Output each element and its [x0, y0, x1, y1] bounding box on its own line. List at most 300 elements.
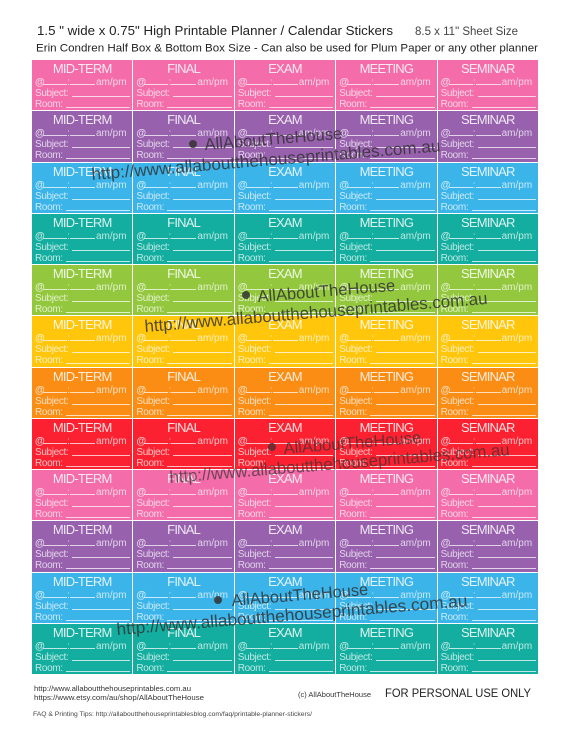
- sheet size note: 8.5 x 11" Sheet Size: [415, 26, 518, 38]
- row 8: red stickers: @: [238, 436, 248, 447]
- row 9: pink stickers: am/pm: [299, 487, 329, 498]
- row 8: red stickers: @: [339, 436, 349, 447]
- row 9: pink stickers: Room:: [136, 509, 164, 520]
- sticker grid: [32, 60, 538, 674]
- row 6: yellow stickers: MEETING: [360, 317, 413, 332]
- row 5: green stickers: Room:: [35, 304, 63, 315]
- row 1: pink stickers: Subject:: [339, 88, 373, 99]
- row 2: purple stickers: Subject:: [441, 139, 474, 150]
- row 7: orange stickers: Subject:: [339, 396, 373, 406]
- row 6: yellow stickers: Subject:: [441, 344, 474, 355]
- row 5: green stickers: Subject:: [35, 293, 68, 304]
- row 10: purple stickers: Subject:: [136, 549, 170, 560]
- row 10: purple stickers: Room:: [35, 560, 63, 571]
- row 8: red stickers: am/pm: [400, 436, 431, 447]
- row 12: teal stickers: SEMINAR: [461, 625, 515, 640]
- row 7: orange stickers: am/pm: [502, 384, 532, 396]
- row 2: purple stickers: Room:: [136, 150, 164, 161]
- row 10: purple stickers: Subject:: [441, 549, 474, 560]
- row 3: blue stickers: [32, 163, 538, 213]
- row 2: purple stickers: Room:: [35, 150, 63, 161]
- row 4: teal stickers: :: [168, 231, 171, 242]
- row 8: red stickers: Room:: [339, 458, 367, 469]
- row 5: green stickers: Subject:: [238, 293, 271, 304]
- row 10: purple stickers: Room:: [441, 560, 468, 571]
- row 3: blue stickers: am/pm: [502, 180, 532, 190]
- row 5: green stickers: Room:: [441, 304, 468, 315]
- row 6: yellow stickers: SEMINAR: [461, 317, 515, 332]
- row 9: pink stickers: :: [67, 487, 70, 498]
- row 9: pink stickers: MEETING: [360, 471, 413, 486]
- header text: [36, 23, 538, 54]
- row 6: yellow stickers: @: [35, 333, 45, 344]
- row 3: blue stickers: :: [270, 180, 273, 190]
- row 11: blue stickers: Subject:: [136, 600, 170, 612]
- row 8: red stickers: Subject:: [339, 447, 373, 458]
- row 6: yellow stickers: @: [339, 333, 349, 344]
- row 9: pink stickers: @: [339, 487, 349, 498]
- row 4: teal stickers: :: [67, 231, 70, 242]
- row 8: red stickers: Subject:: [35, 447, 68, 458]
- row 8: red stickers: Room:: [35, 458, 63, 469]
- row 6: yellow stickers: @: [238, 333, 248, 344]
- FAQ link: FAQ & Printing Tips: http://allaboutthehouseprintablesblog.com/faq/printable-planner-stickers/: [33, 712, 312, 718]
- row 5: green stickers: MEETING: [360, 266, 413, 281]
- row 2: purple stickers: Room:: [441, 150, 468, 161]
- row 8: red stickers: :: [67, 436, 70, 447]
- row 5: green stickers: :: [270, 282, 273, 293]
- row 7: orange stickers: Room:: [136, 406, 164, 418]
- row 9: pink stickers: MID-TERM: [53, 471, 111, 486]
- row 1: pink stickers: am/pm: [299, 77, 329, 88]
- row 8: red stickers: Subject:: [238, 447, 271, 458]
- row 7: orange stickers: :: [168, 384, 171, 396]
- row 4: teal stickers: Subject:: [35, 242, 68, 253]
- row 1: pink stickers: @: [136, 77, 146, 88]
- row 12: teal stickers: Room:: [441, 663, 468, 674]
- row 11: blue stickers: Subject:: [441, 600, 474, 612]
- row 12: teal stickers: FINAL: [167, 625, 200, 640]
- row 6: yellow stickers: am/pm: [96, 333, 127, 344]
- row 5: green stickers: :: [67, 282, 70, 293]
- row 10: purple stickers: @: [339, 538, 349, 549]
- row 11: blue stickers: EXAM: [268, 574, 302, 588]
- row 11: blue stickers: MID-TERM: [53, 574, 111, 588]
- row 6: yellow stickers: FINAL: [167, 317, 200, 332]
- row 9: pink stickers: @: [238, 487, 248, 498]
- row 6: yellow stickers: @: [136, 333, 146, 344]
- row 2: purple stickers: MEETING: [360, 112, 413, 127]
- row 3: blue stickers: :: [473, 180, 475, 190]
- row 2: purple stickers: Subject:: [136, 139, 170, 150]
- row 3: blue stickers: @: [441, 180, 450, 190]
- row 9: pink stickers: Subject:: [339, 498, 373, 509]
- row 1: pink stickers: MEETING: [360, 61, 413, 76]
- personal use notice: FOR PERSONAL USE ONLY: [385, 688, 531, 700]
- row 5: green stickers: am/pm: [400, 282, 431, 293]
- row 12: teal stickers: @: [441, 641, 450, 652]
- row 9: pink stickers: Room:: [238, 509, 266, 520]
- row 9: pink stickers: @: [35, 487, 45, 498]
- row 5: green stickers: EXAM: [268, 266, 302, 281]
- row 1: pink stickers: :: [168, 77, 171, 88]
- row 3: blue stickers: :: [67, 180, 70, 190]
- footer links: https://www.etsy.com/au/shop/AllAboutTheHouse: [34, 693, 204, 702]
- row 9: pink stickers: :: [371, 487, 374, 498]
- row 12: teal stickers: [32, 624, 538, 674]
- footer links: [34, 684, 204, 702]
- row 1: pink stickers: am/pm: [197, 77, 228, 88]
- row 8: red stickers: [32, 419, 538, 469]
- row 3: blue stickers: EXAM: [268, 164, 302, 178]
- row 3: blue stickers: Room:: [238, 202, 266, 212]
- row 4: teal stickers: :: [371, 231, 374, 242]
- row 10: purple stickers: am/pm: [502, 538, 532, 549]
- row 7: orange stickers: [32, 368, 538, 418]
- row 1: pink stickers: Room:: [441, 99, 468, 110]
- row 6: yellow stickers: MID-TERM: [53, 317, 111, 332]
- row 9: pink stickers: FINAL: [167, 471, 200, 486]
- row 8: red stickers: MEETING: [360, 420, 413, 435]
- row 8: red stickers: :: [371, 436, 374, 447]
- row 5: green stickers: Subject:: [339, 293, 373, 304]
- row 4: teal stickers: @: [35, 231, 45, 242]
- row 4: teal stickers: FINAL: [167, 215, 200, 230]
- row 7: orange stickers: :: [371, 384, 374, 396]
- row 3: blue stickers: @: [238, 180, 248, 190]
- row 11: blue stickers: FINAL: [167, 574, 200, 588]
- row 7: orange stickers: Room:: [35, 406, 63, 418]
- row 12: teal stickers: :: [168, 641, 171, 652]
- row 12: teal stickers: Subject:: [35, 652, 68, 663]
- row 4: teal stickers: MEETING: [360, 215, 413, 230]
- row 11: blue stickers: Room:: [238, 612, 266, 622]
- row 1: pink stickers: Room:: [35, 99, 63, 110]
- row 5: green stickers: Room:: [238, 304, 266, 315]
- row 4: teal stickers: @: [136, 231, 146, 242]
- row 4: teal stickers: Subject:: [441, 242, 474, 253]
- row 12: teal stickers: Room:: [339, 663, 367, 674]
- row 2: purple stickers: EXAM: [268, 112, 302, 127]
- row 12: teal stickers: MID-TERM: [53, 625, 111, 640]
- row 2: purple stickers: @: [339, 128, 349, 139]
- row 11: blue stickers: am/pm: [96, 590, 127, 600]
- row 8: red stickers: Room:: [441, 458, 468, 469]
- row 3: blue stickers: am/pm: [400, 180, 431, 190]
- row 12: teal stickers: Subject:: [136, 652, 170, 663]
- row 2: purple stickers: :: [67, 128, 70, 139]
- row 5: green stickers: @: [339, 282, 349, 293]
- row 3: blue stickers: MID-TERM: [53, 164, 111, 178]
- row 11: blue stickers: Subject:: [35, 600, 68, 612]
- row 10: purple stickers: am/pm: [96, 538, 127, 549]
- row 3: blue stickers: :: [168, 180, 171, 190]
- row 12: teal stickers: :: [371, 641, 374, 652]
- row 4: teal stickers: Room:: [339, 253, 367, 264]
- row 1: pink stickers: FINAL: [167, 61, 200, 76]
- row 10: purple stickers: am/pm: [400, 538, 431, 549]
- row 7: orange stickers: EXAM: [268, 368, 302, 384]
- row 9: pink stickers: am/pm: [96, 487, 127, 498]
- row 10: purple stickers: am/pm: [197, 538, 228, 549]
- row 2: purple stickers: Room:: [238, 150, 266, 161]
- row 7: orange stickers: am/pm: [197, 384, 228, 396]
- row 6: yellow stickers: :: [270, 333, 273, 344]
- row 11: blue stickers: am/pm: [299, 590, 329, 600]
- row 11: blue stickers: :: [67, 590, 70, 600]
- row 5: green stickers: @: [238, 282, 248, 293]
- row 2: purple stickers: Subject:: [339, 139, 373, 150]
- row 8: red stickers: Subject:: [136, 447, 170, 458]
- row 7: orange stickers: :: [473, 384, 475, 396]
- row 2: purple stickers: am/pm: [299, 128, 329, 139]
- row 10: purple stickers: [32, 521, 538, 572]
- row 7: orange stickers: @: [441, 384, 450, 396]
- row 10: purple stickers: :: [67, 538, 70, 549]
- row 4: teal stickers: MID-TERM: [53, 215, 111, 230]
- row 10: purple stickers: @: [238, 538, 248, 549]
- row 11: blue stickers: @: [136, 590, 146, 600]
- row 7: orange stickers: Subject:: [441, 396, 474, 406]
- row 8: red stickers: Room:: [238, 458, 266, 469]
- row 11: blue stickers: Subject:: [339, 600, 373, 612]
- row 10: purple stickers: Room:: [339, 560, 367, 571]
- row 11: blue stickers: am/pm: [197, 590, 228, 600]
- row 9: pink stickers: am/pm: [502, 487, 532, 498]
- row 8: red stickers: Subject:: [441, 447, 474, 458]
- row 3: blue stickers: @: [35, 180, 45, 190]
- row 7: orange stickers: am/pm: [96, 384, 127, 396]
- row 10: purple stickers: @: [441, 538, 450, 549]
- row 7: orange stickers: :: [67, 384, 70, 396]
- watermark 3: AllAboutTheHouse: [283, 429, 422, 458]
- row 12: teal stickers: EXAM: [268, 625, 302, 640]
- watermark 1: http://www.allaboutthehouseprintables.com.au: [91, 136, 441, 184]
- row 12: teal stickers: Room:: [136, 663, 164, 674]
- row 4: teal stickers: am/pm: [197, 231, 228, 242]
- row 1: pink stickers: MID-TERM: [53, 61, 111, 76]
- row 12: teal stickers: :: [67, 641, 70, 652]
- row 2: purple stickers: Subject:: [238, 139, 271, 150]
- row 7: orange stickers: Room:: [238, 406, 266, 418]
- row 3: blue stickers: am/pm: [197, 180, 228, 190]
- row 1: pink stickers: @: [339, 77, 349, 88]
- row 2: purple stickers: SEMINAR: [461, 112, 515, 127]
- row 7: orange stickers: @: [238, 384, 248, 396]
- row 8: red stickers: @: [441, 436, 450, 447]
- row 7: orange stickers: am/pm: [299, 384, 329, 396]
- row 11: blue stickers: am/pm: [400, 590, 431, 600]
- row 2: purple stickers: am/pm: [502, 128, 532, 139]
- row 3: blue stickers: FINAL: [167, 164, 200, 178]
- row 10: purple stickers: Room:: [238, 560, 266, 571]
- row 9: pink stickers: am/pm: [400, 487, 431, 498]
- row 6: yellow stickers: :: [473, 333, 475, 344]
- row 7: orange stickers: am/pm: [400, 384, 431, 396]
- row 5: green stickers: Room:: [136, 304, 164, 315]
- row 10: purple stickers: MID-TERM: [53, 522, 111, 537]
- row 4: teal stickers: @: [339, 231, 349, 242]
- row 8: red stickers: @: [35, 436, 45, 447]
- row 2: purple stickers: FINAL: [167, 112, 200, 127]
- row 12: teal stickers: @: [136, 641, 146, 652]
- row 3: blue stickers: Room:: [339, 202, 367, 212]
- row 1: pink stickers: :: [67, 77, 70, 88]
- row 4: teal stickers: Subject:: [339, 242, 373, 253]
- row 12: teal stickers: Subject:: [339, 652, 373, 663]
- row 11: blue stickers: Room:: [441, 612, 468, 622]
- row 4: teal stickers: @: [441, 231, 450, 242]
- row 7: orange stickers: Subject:: [136, 396, 170, 406]
- row 11: blue stickers: Room:: [339, 612, 367, 622]
- row 11: blue stickers: am/pm: [502, 590, 532, 600]
- row 1: pink stickers: EXAM: [268, 61, 302, 76]
- row 9: pink stickers: Room:: [35, 509, 63, 520]
- row 3: blue stickers: Subject:: [35, 190, 68, 202]
- row 7: orange stickers: MEETING: [360, 368, 413, 384]
- row 8: red stickers: am/pm: [197, 436, 228, 447]
- row 12: teal stickers: am/pm: [299, 641, 329, 652]
- row 11: blue stickers: Room:: [136, 612, 164, 622]
- row 10: purple stickers: SEMINAR: [461, 522, 515, 537]
- row 12: teal stickers: @: [339, 641, 349, 652]
- row 1: pink stickers: Subject:: [441, 88, 474, 99]
- row 11: blue stickers: :: [473, 590, 475, 600]
- row 4: teal stickers: Room:: [238, 253, 266, 264]
- row 12: teal stickers: MEETING: [360, 625, 413, 640]
- row 3: blue stickers: Room:: [35, 202, 63, 212]
- row 10: purple stickers: MEETING: [360, 522, 413, 537]
- row 8: red stickers: am/pm: [96, 436, 127, 447]
- row 2: purple stickers: [32, 111, 538, 162]
- row 11: blue stickers: :: [371, 590, 374, 600]
- row 2: purple stickers: :: [168, 128, 171, 139]
- row 1: pink stickers: @: [238, 77, 248, 88]
- row 3: blue stickers: Subject:: [136, 190, 170, 202]
- row 2: purple stickers: am/pm: [400, 128, 431, 139]
- row 11: blue stickers: @: [35, 590, 45, 600]
- row 12: teal stickers: Subject:: [238, 652, 271, 663]
- row 12: teal stickers: :: [473, 641, 475, 652]
- row 5: green stickers: Subject:: [441, 293, 474, 304]
- row 9: pink stickers: @: [136, 487, 146, 498]
- row 7: orange stickers: Subject:: [35, 396, 68, 406]
- watermark 3: http://www.allaboutthehouseprintables.com.au: [169, 440, 510, 487]
- row 10: purple stickers: am/pm: [299, 538, 329, 549]
- copyright: (c) AllAboutTheHouse: [298, 690, 371, 699]
- row 4: teal stickers: [32, 214, 538, 264]
- watermark 2: http://www.allaboutthehouseprintables.com.au: [144, 289, 488, 336]
- row 10: purple stickers: FINAL: [167, 522, 200, 537]
- row 2: purple stickers: am/pm: [197, 128, 228, 139]
- row 10: purple stickers: Subject:: [339, 549, 373, 560]
- row 4: teal stickers: Room:: [136, 253, 164, 264]
- row 2: purple stickers: @: [136, 128, 146, 139]
- row 12: teal stickers: Subject:: [441, 652, 474, 663]
- row 1: pink stickers: am/pm: [502, 77, 532, 88]
- row 7: orange stickers: :: [270, 384, 273, 396]
- row 11: blue stickers: :: [270, 590, 273, 600]
- row 9: pink stickers: Subject:: [136, 498, 170, 509]
- row 1: pink stickers: @: [441, 77, 450, 88]
- row 11: blue stickers: :: [168, 590, 171, 600]
- row 4: teal stickers: am/pm: [400, 231, 431, 242]
- row 8: red stickers: SEMINAR: [461, 420, 515, 435]
- row 5: green stickers: Room:: [339, 304, 367, 315]
- row 3: blue stickers: am/pm: [96, 180, 127, 190]
- row 11: blue stickers: MEETING: [360, 574, 413, 588]
- row 3: blue stickers: Room:: [441, 202, 468, 212]
- row 7: orange stickers: MID-TERM: [53, 368, 111, 384]
- row 12: teal stickers: :: [270, 641, 273, 652]
- row 7: orange stickers: SEMINAR: [461, 368, 515, 384]
- row 4: teal stickers: @: [238, 231, 248, 242]
- row 12: teal stickers: Room:: [238, 663, 266, 674]
- row 4: teal stickers: Subject:: [238, 242, 271, 253]
- row 2: purple stickers: :: [371, 128, 374, 139]
- row 9: pink stickers: Room:: [441, 509, 468, 520]
- row 7: orange stickers: @: [136, 384, 146, 396]
- row 9: pink stickers: am/pm: [197, 487, 228, 498]
- row 1: pink stickers: @: [35, 77, 45, 88]
- row 12: teal stickers: am/pm: [400, 641, 431, 652]
- row 8: red stickers: :: [168, 436, 171, 447]
- row 2: purple stickers: @: [35, 128, 45, 139]
- row 10: purple stickers: :: [168, 538, 171, 549]
- row 5: green stickers: :: [473, 282, 475, 293]
- row 8: red stickers: :: [473, 436, 475, 447]
- row 1: pink stickers: Subject:: [136, 88, 170, 99]
- row 1: pink stickers: Room:: [136, 99, 164, 110]
- row 1: pink stickers: am/pm: [96, 77, 127, 88]
- row 8: red stickers: Room:: [136, 458, 164, 469]
- watermark 1: AllAboutTheHouse: [204, 125, 343, 154]
- row 3: blue stickers: Room:: [136, 202, 164, 212]
- row 3: blue stickers: Subject:: [441, 190, 474, 202]
- row 6: yellow stickers: Subject:: [35, 344, 68, 355]
- row 12: teal stickers: am/pm: [197, 641, 228, 652]
- row 9: pink stickers: Subject:: [441, 498, 474, 509]
- row 3: blue stickers: am/pm: [299, 180, 329, 190]
- row 8: red stickers: FINAL: [167, 420, 200, 435]
- row 3: blue stickers: Subject:: [238, 190, 271, 202]
- row 10: purple stickers: Room:: [136, 560, 164, 571]
- row 6: yellow stickers: EXAM: [268, 317, 302, 332]
- row 9: pink stickers: Subject:: [35, 498, 68, 509]
- row 5: green stickers: SEMINAR: [461, 266, 515, 281]
- row 6: yellow stickers: Room:: [136, 355, 164, 366]
- row 5: green stickers: Subject:: [136, 293, 170, 304]
- row 7: orange stickers: Room:: [339, 406, 367, 418]
- row 8: red stickers: am/pm: [299, 436, 329, 447]
- row 10: purple stickers: EXAM: [268, 522, 302, 537]
- row 5: green stickers: FINAL: [167, 266, 200, 281]
- row 6: yellow stickers: :: [371, 333, 374, 344]
- row 3: blue stickers: @: [339, 180, 349, 190]
- row 2: purple stickers: :: [270, 128, 273, 139]
- row 3: blue stickers: MEETING: [360, 164, 413, 178]
- row 6: yellow stickers: :: [67, 333, 70, 344]
- row 6: yellow stickers: @: [441, 333, 450, 344]
- row 9: pink stickers: Subject:: [238, 498, 271, 509]
- row 5: green stickers: @: [441, 282, 450, 293]
- row 6: yellow stickers: am/pm: [299, 333, 329, 344]
- row 10: purple stickers: Subject:: [238, 549, 271, 560]
- row 11: blue stickers: Subject:: [238, 600, 271, 612]
- row 6: yellow stickers: Subject:: [339, 344, 373, 355]
- row 2: purple stickers: Room:: [339, 150, 367, 161]
- row 6: yellow stickers: Room:: [238, 355, 266, 366]
